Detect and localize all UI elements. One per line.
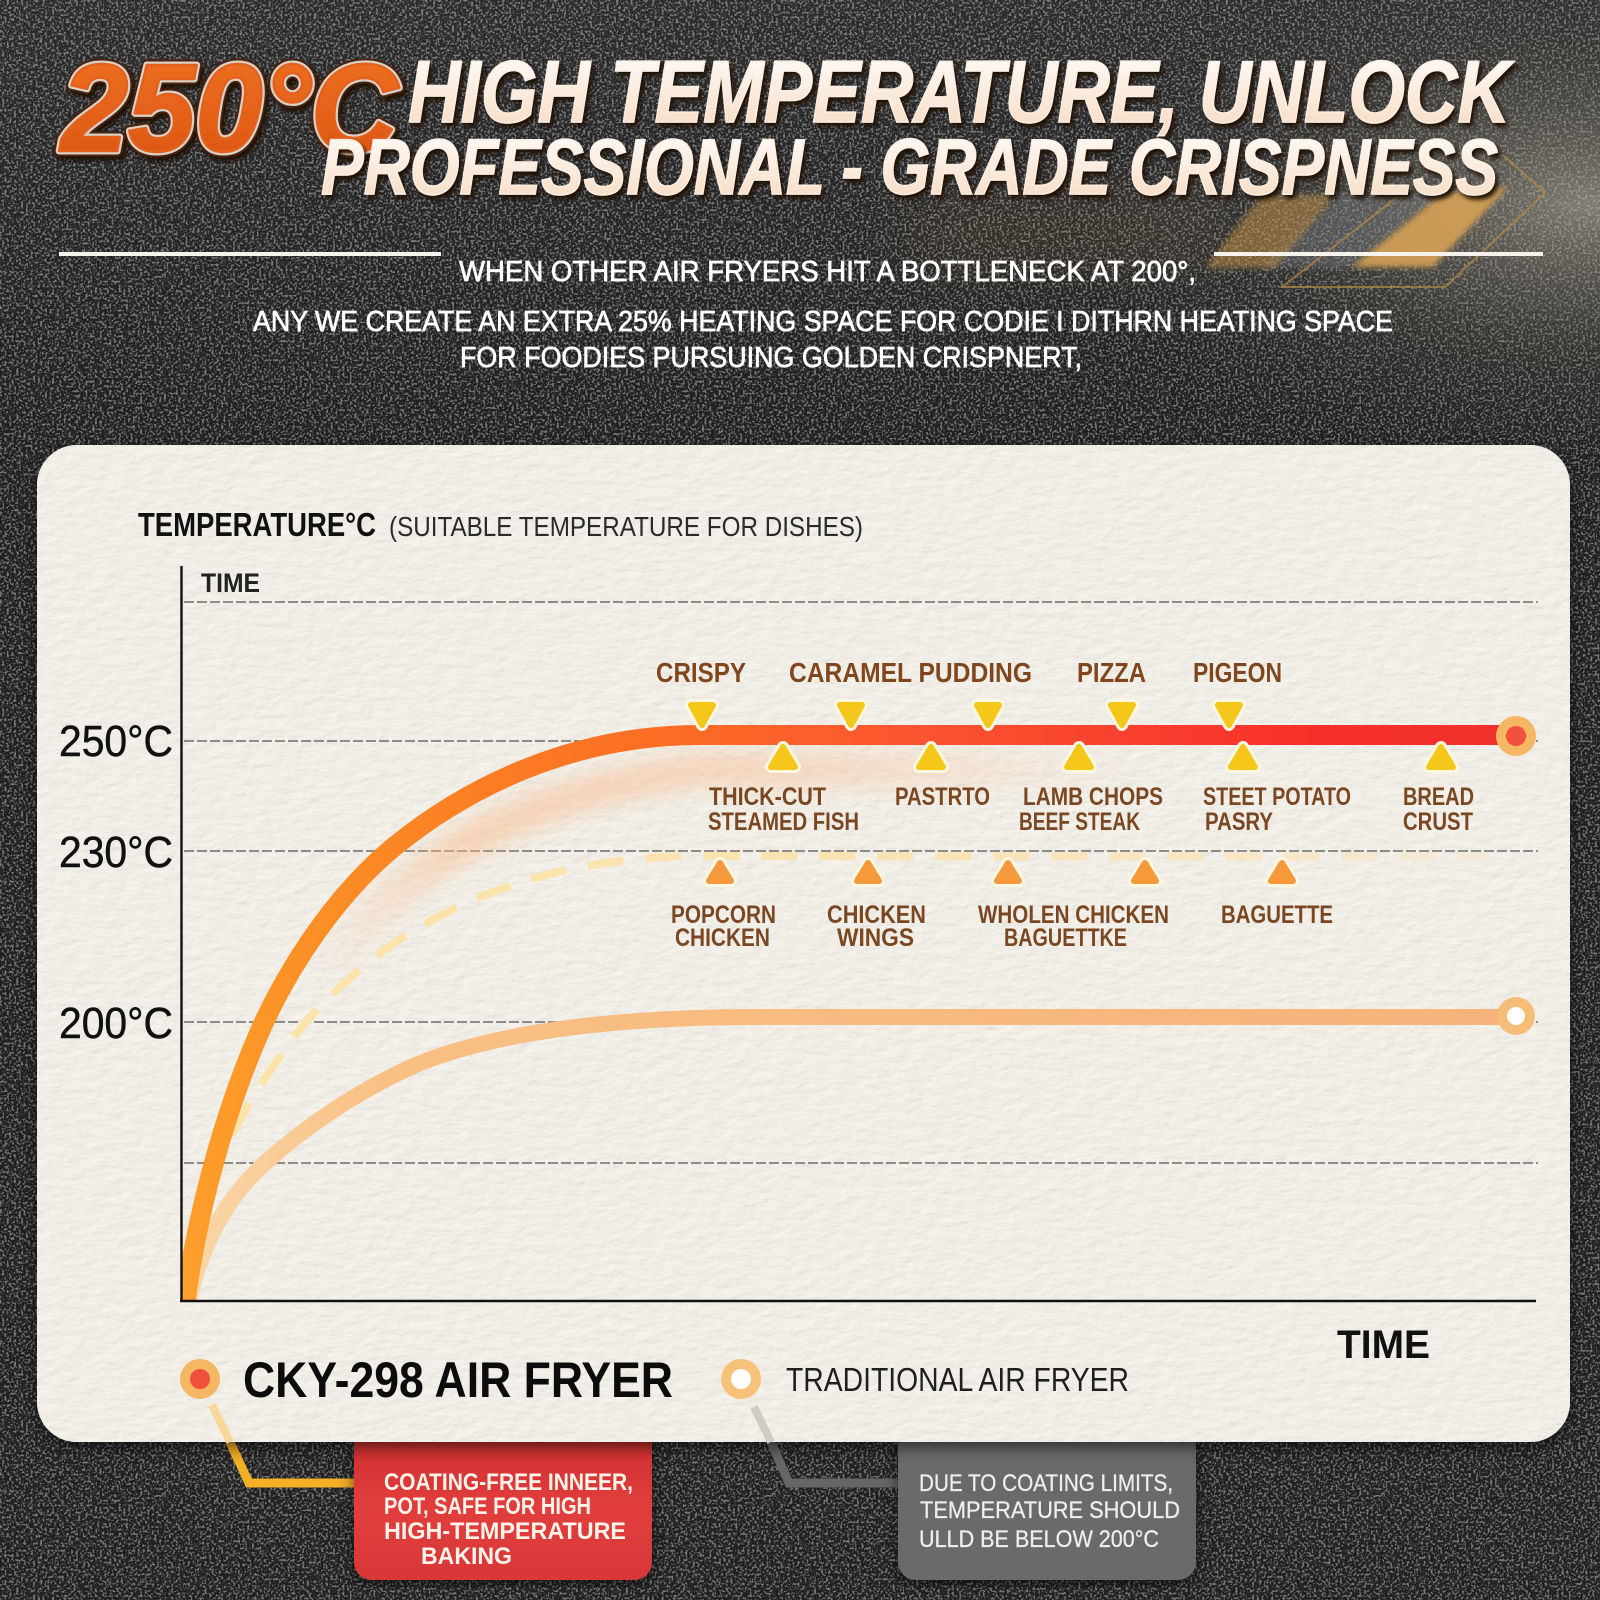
callout: coating limits note (898, 1436, 1196, 1580)
labels: 230°C dishes: BAGUETTE (1221, 901, 1333, 929)
temperature labels (59, 717, 173, 1048)
labels: 250°C dishes above line: PIZZA (1077, 657, 1146, 688)
labels: 230°C dishes: WINGS (837, 924, 914, 952)
gridlines (184, 602, 1538, 1163)
curve: CKY-298 at 250°C (185, 735, 1505, 1304)
labels: dishes below 250°C line: CRUST (1403, 808, 1473, 836)
title (59, 40, 1514, 211)
labels: 250°C dishes above line (656, 657, 1282, 688)
legend: CKY-298 air fryer: CKY-298 AIR FRYER (243, 1352, 673, 1408)
connector: traditional to grey note (771, 1442, 898, 1483)
callout: coating-free note (354, 1436, 652, 1580)
axes (180, 566, 1536, 1301)
labels: 230°C dishes (671, 901, 1333, 952)
end marker: 250°C (1496, 716, 1536, 756)
end marker: 200°C (1497, 997, 1535, 1035)
chart heading: (SUITABLE TEMPERATURE FOR DISHES) (389, 511, 863, 542)
labels: 230°C dishes: WHOLEN CHICKEN (978, 901, 1169, 929)
callout text: COATING-FREE INNEER, (384, 1469, 633, 1496)
title badge: 250°C: 250°C (59, 40, 399, 178)
title badge: 250°C: 250°C (59, 40, 399, 178)
labels: dishes below 250°C line: LAMB CHOPS (1023, 783, 1163, 811)
grey callout text: DUE TO COATING LIMITS, (919, 1470, 1173, 1497)
labels: 230°C dishes: CHICKEN (675, 924, 770, 952)
temperature labels: 230°C (59, 828, 173, 877)
subtitle text (253, 256, 1393, 374)
callout text: HIGH-TEMPERATURE (384, 1518, 626, 1545)
labels: dishes below 250°C line: STEET POTATO (1203, 783, 1351, 811)
chart heading (138, 506, 863, 543)
labels: dishes below 250°C line (708, 783, 1474, 836)
labels: 250°C dishes above line: PIGEON (1193, 657, 1282, 688)
panel: temperature chart card (37, 445, 1570, 1442)
labels: 250°C dishes above line: CARAMEL PUDDING (789, 657, 1032, 688)
title badge: 250°C: 250°C (59, 40, 399, 178)
markers: yellow up triangles (771, 747, 1453, 767)
grey callout text: ULLD BE BELOW 200°C (919, 1526, 1159, 1553)
labels: dishes below 250°C line: BEEF STEAK (1019, 808, 1140, 836)
labels: dishes below 250°C line: STEAMED FISH (708, 808, 859, 836)
markers: yellow down triangles (691, 705, 1240, 725)
curve: dashed 230°C (232, 856, 1490, 1135)
labels: 230°C dishes: CHICKEN (827, 901, 926, 929)
labels: 250°C dishes above line: CRISPY (656, 657, 746, 688)
grey callout text (919, 1470, 1180, 1553)
labels: dishes below 250°C line: THICK-CUT (709, 783, 826, 811)
heat glow beneath curve (330, 770, 1150, 965)
x axis title: time: TIME (1337, 1323, 1430, 1367)
markers: orange up triangles (709, 863, 1293, 881)
legend: traditional air fryer: TRADITIONAL AIR FRYER (786, 1361, 1129, 1398)
curve: traditional fryer at 200°C (188, 1017, 1500, 1304)
chart heading: TEMPERATURE°C (138, 506, 376, 543)
connector stubs on card (212, 1405, 771, 1442)
y axis title: time: TIME (201, 568, 260, 598)
labels: 230°C dishes: POPCORN (671, 901, 776, 929)
decorative chevrons behind header (900, 155, 1545, 287)
callout text: BAKING (421, 1543, 512, 1570)
temperature labels: 250°C (59, 717, 173, 766)
subtitle line 3: FOR FOODIES PURSUING GOLDEN CRISPNERT, (460, 342, 1082, 374)
header rules (59, 252, 1543, 256)
labels: dishes below 250°C line: PASRY (1205, 808, 1273, 836)
subtitle line 2: ANY WE CREATE AN EXTRA 25% HEATING SPACE FOR CODIE I DITHRN HEATING SPACE (253, 306, 1393, 338)
callout text: POT, SAFE FOR HIGH (384, 1493, 591, 1520)
grey callout text: TEMPERATURE SHOULD (920, 1497, 1180, 1524)
temperature labels: 200°C (59, 999, 173, 1048)
connector: CKY-298 to red note (230, 1442, 361, 1483)
legend: traditional air fryer (721, 1359, 1129, 1399)
labels: dishes below 250°C line: PASTRTO (895, 783, 990, 811)
labels: 230°C dishes: BAGUETTKE (1004, 924, 1127, 952)
callout text (384, 1469, 633, 1570)
labels: dishes below 250°C line: BREAD (1403, 783, 1474, 811)
subtitle line 1: WHEN OTHER AIR FRYERS HIT A BOTTLENECK AT 200°, (459, 256, 1196, 288)
